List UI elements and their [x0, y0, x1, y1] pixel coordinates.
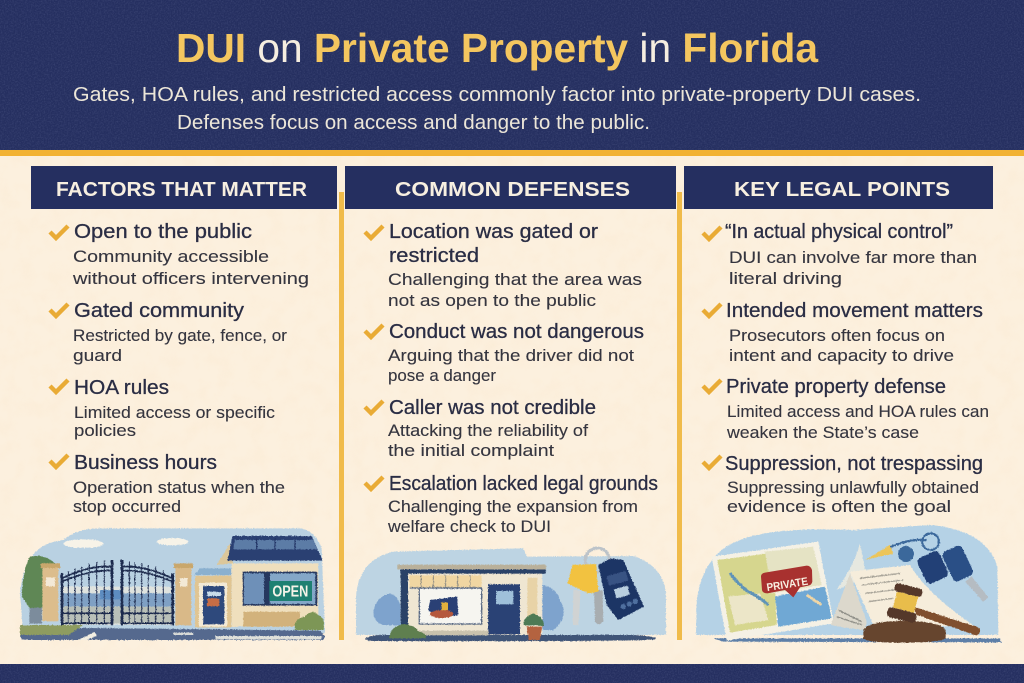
key fob set: [865, 545, 893, 560]
item: location was gated: [365, 221, 642, 310]
gavel: [863, 621, 946, 643]
item: private property defense: [703, 376, 989, 442]
subtitle: Defenses focus on access and danger to the public.: [177, 112, 650, 134]
subtitle: [73, 84, 921, 134]
item: open to the public: Open to the public: [74, 221, 252, 243]
open book: [831, 573, 867, 630]
item: intended movement matters: Intended movement matters: [726, 300, 983, 322]
item: location was gated: restricted: [389, 245, 479, 267]
item: location was gated: Challenging that the area was: [388, 271, 642, 289]
item: suppression, not trespassing: [703, 453, 983, 516]
item: escalation lacked legal grounds: welfare check to DUI: [387, 518, 551, 536]
item: open to the public: [50, 221, 309, 288]
item: conduct was not dangerous: Arguing that the driver did not: [388, 347, 634, 365]
item: intended movement matters: intent and capacity to drive: [729, 347, 954, 365]
panel: key legal points: [684, 166, 1002, 643]
illustration: gated community and open storefront: [20, 528, 325, 640]
heading: key legal points: [684, 166, 993, 209]
item: gated community: Restricted by gate, fence, or: [73, 327, 288, 345]
item: business hours: [50, 452, 285, 516]
open sign: OPEN: [272, 584, 308, 601]
cream background: [0, 150, 1024, 664]
item: private property defense: Limited access and HOA rules can: [727, 403, 989, 421]
item: location was gated: not as open to the public: [388, 292, 596, 310]
subtitle: Gates, HOA rules, and restricted access commonly factor into private-property DUI cases.: [73, 84, 921, 106]
heading: common defenses: [345, 166, 676, 209]
item: intended movement matters: [703, 300, 983, 365]
item: escalation lacked legal grounds: Escalation lacked legal grounds: [389, 473, 658, 495]
item: suppression, not trespassing: Suppressing unlawfully obtained: [727, 479, 979, 497]
item: HOA rules: Limited access or specific: [74, 404, 275, 422]
item: gated community: Gated community: [74, 300, 244, 322]
item: caller was not credible: Attacking the reliability of: [388, 422, 588, 440]
item: HOA rules: policies: [74, 422, 136, 440]
item: intended movement matters: Prosecutors often focus on: [729, 327, 945, 345]
gold rule under header: [0, 150, 1024, 156]
item: business hours: Operation status when the: [73, 479, 285, 497]
item: HOA rules: [50, 377, 275, 440]
item: gated community: guard: [73, 347, 122, 365]
item: in actual physical control: literal driving: [729, 270, 842, 288]
item: escalation lacked legal grounds: Challenging the expansion from: [388, 498, 638, 516]
item: caller was not credible: [365, 397, 596, 460]
item: in actual physical control: “In actual physical control”: [725, 221, 953, 243]
item: gated community: [50, 300, 288, 365]
heading: key legal points: KEY LEGAL POINTS: [734, 179, 950, 201]
illustration: storefront and car keys: [356, 548, 666, 641]
item: escalation lacked legal grounds: [365, 473, 658, 536]
private pin: [761, 566, 812, 597]
item: suppression, not trespassing: evidence is often the goal: [727, 498, 951, 516]
item: in actual physical control: DUI can involve far more than: [729, 249, 977, 267]
item: in actual physical control: [703, 221, 977, 288]
private pin: PRIVATE: [766, 576, 809, 594]
item: business hours: Business hours: [74, 452, 217, 474]
heading: factors that matter: FACTORS THAT MATTER: [56, 179, 308, 201]
item: private property defense: weaken the State’s case: [726, 424, 919, 442]
panel: common defenses: [345, 166, 676, 641]
heading: factors that matter: [31, 166, 337, 209]
item: suppression, not trespassing: Suppression, not trespassing: [725, 453, 983, 475]
item: open to the public: Community accessible: [73, 248, 269, 266]
illustration: map, law book, gavel and keys: [696, 525, 1002, 643]
footer band: [0, 664, 1024, 683]
item: business hours: stop occurred: [73, 498, 181, 516]
item: conduct was not dangerous: Conduct was not dangerous: [389, 321, 644, 343]
item: location was gated: Location was gated or: [389, 221, 598, 243]
item: caller was not credible: Caller was not credible: [389, 397, 596, 419]
item: conduct was not dangerous: [365, 321, 644, 385]
item: private property defense: Private property defense: [726, 376, 946, 398]
item: HOA rules: HOA rules: [74, 377, 169, 399]
item: caller was not credible: the initial complaint: [388, 442, 554, 460]
title: DUI on Private Property in Florida: [176, 25, 819, 71]
heading: common defenses: COMMON DEFENSES: [395, 179, 630, 201]
document: [850, 565, 975, 627]
panel: factors that matter: [20, 166, 337, 640]
item: open to the public: without officers intervening: [72, 270, 309, 288]
header band: [0, 0, 1024, 150]
item: conduct was not dangerous: pose a danger: [388, 367, 497, 385]
